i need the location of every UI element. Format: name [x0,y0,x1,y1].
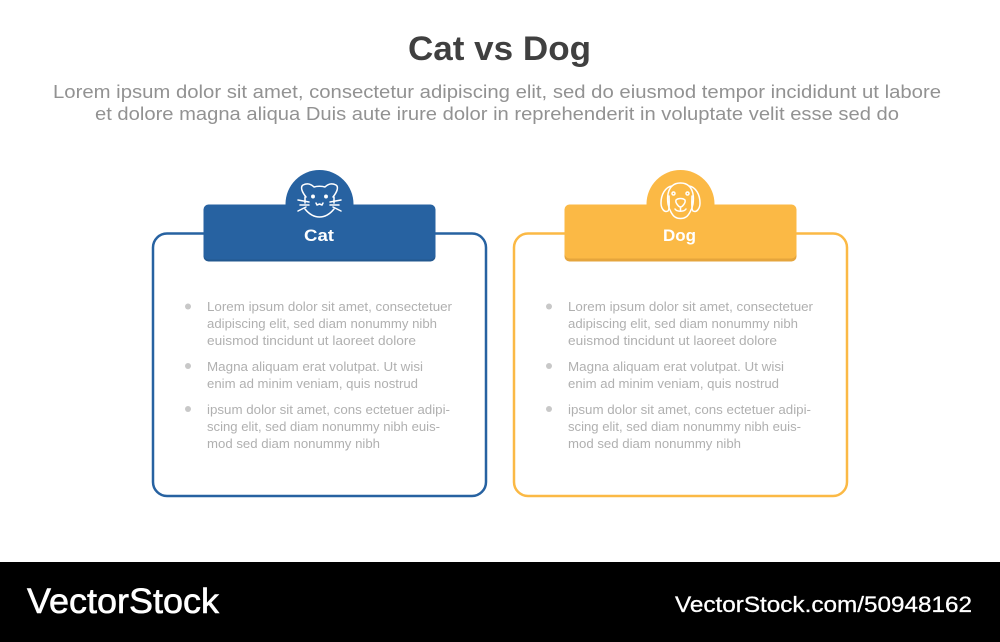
cat bullet list: adipiscing elit, sed diam nonummy nibh [207,316,437,331]
cat bullet list: scing elit, sed diam nonummy nibh euis- [207,419,440,434]
dog label: Dog [663,227,696,245]
dog bullet list: ipsum dolor sit amet, cons ectetuer adipi- [568,402,811,417]
title: Cat vs Dog [408,30,591,68]
dog bullet list: Lorem ipsum dolor sit amet, consectetuer [568,299,814,314]
cat bullet list: ipsum dolor sit amet, cons ectetuer adipi- [207,402,450,417]
dog bullet list: Magna aliquam erat volutpat. Ut wisi [568,359,784,374]
dog bullet list [546,299,814,451]
footer image id: VectorStock.com/50948162 [675,592,972,617]
dog bullet list: adipiscing elit, sed diam nonummy nibh [568,316,798,331]
cat header bar [204,204,436,260]
cat bullet list: Lorem ipsum dolor sit amet, consectetuer [207,299,453,314]
cat bullet list: enim ad minim veniam, quis nostrud [207,376,418,391]
subtitle: et dolore magna aliqua Duis aute irure dolor in reprehenderit in voluptate velit esse sed do [95,103,899,124]
cat label: Cat [304,227,335,245]
cat bullet list: Magna aliquam erat volutpat. Ut wisi [207,359,423,374]
cat bullet list: euismod tincidunt ut laoreet dolore [207,333,416,348]
dog header circle [646,170,714,238]
dog bullet list: scing elit, sed diam nonummy nibh euis- [568,419,801,434]
dog bullet list: enim ad minim veniam, quis nostrud [568,376,779,391]
panel: cat [153,170,486,496]
cat panel outline [153,234,486,496]
dog bullet list: euismod tincidunt ut laoreet dolore [568,333,777,348]
icon: dog face [661,183,700,218]
cat bullet list [185,299,453,451]
cat header circle [286,170,354,238]
subtitle: Lorem ipsum dolor sit amet, consectetur adipiscing elit, sed do eiusmod tempor incididunt ut labore [53,81,941,102]
footer bar [0,562,1000,642]
dog header bar shadow [564,206,796,262]
footer brand: VectorStock [27,582,220,621]
cat bullet list: mod sed diam nonummy nibh [207,436,380,451]
subtitle [53,81,941,124]
cat header bar shadow [204,206,436,262]
dog bullet list: mod sed diam nonummy nibh [568,436,741,451]
icon: cat face [298,184,341,217]
dog panel outline [514,234,847,496]
panel: dog [514,170,847,496]
dog header bar [564,204,796,258]
